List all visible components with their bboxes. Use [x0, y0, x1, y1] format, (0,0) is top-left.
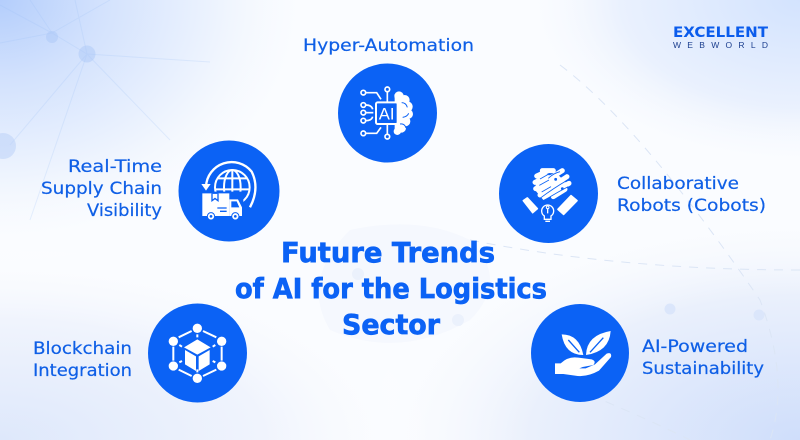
- label: Collaborative Robots: [617, 174, 766, 215]
- circle icon: hand holding plant: [531, 304, 629, 402]
- label: Blockchain Integration: [33, 339, 132, 380]
- logo: EXCELLENT: [673, 25, 768, 41]
- label: Blockchain Integration: Blockchain: [33, 339, 132, 358]
- title: [235, 237, 547, 341]
- label: Real-Time Supply Chain Visibility: [41, 157, 162, 220]
- circle icon: globe and delivery truck: [178, 140, 280, 242]
- label: Collaborative Robots: Collaborative: [617, 174, 739, 193]
- circle icon: AI brain: AI: [379, 104, 395, 123]
- label: AI-Powered Sustainability: Sustainability: [642, 359, 764, 378]
- label: AI-Powered Sustainability: [642, 337, 764, 378]
- circle icon: blockchain cube: [148, 304, 247, 402]
- circle icon: AI brain: [338, 64, 437, 162]
- label: Hyper-Automation: Hyper-Automation: [303, 36, 474, 55]
- label: Blockchain Integration: Integration: [33, 361, 132, 380]
- label: Real-Time Supply Chain Visibility: Visibility: [87, 201, 162, 220]
- title: Future Trends: [281, 237, 495, 269]
- label: Real-Time Supply Chain Visibility: Supply Chain: [41, 179, 162, 198]
- logo: WEBWORLD: [673, 40, 768, 50]
- label: AI-Powered Sustainability: AI-Powered: [642, 337, 748, 356]
- circle icon: robot and human handshake: [499, 144, 598, 243]
- logo: [673, 25, 768, 50]
- title: Sector: [342, 309, 440, 341]
- label: Real-Time Supply Chain Visibility: Real-Time: [68, 157, 162, 176]
- label: Collaborative Robots: Robots (Cobots): [617, 196, 766, 215]
- title: of AI for the Logistics: [235, 273, 547, 305]
